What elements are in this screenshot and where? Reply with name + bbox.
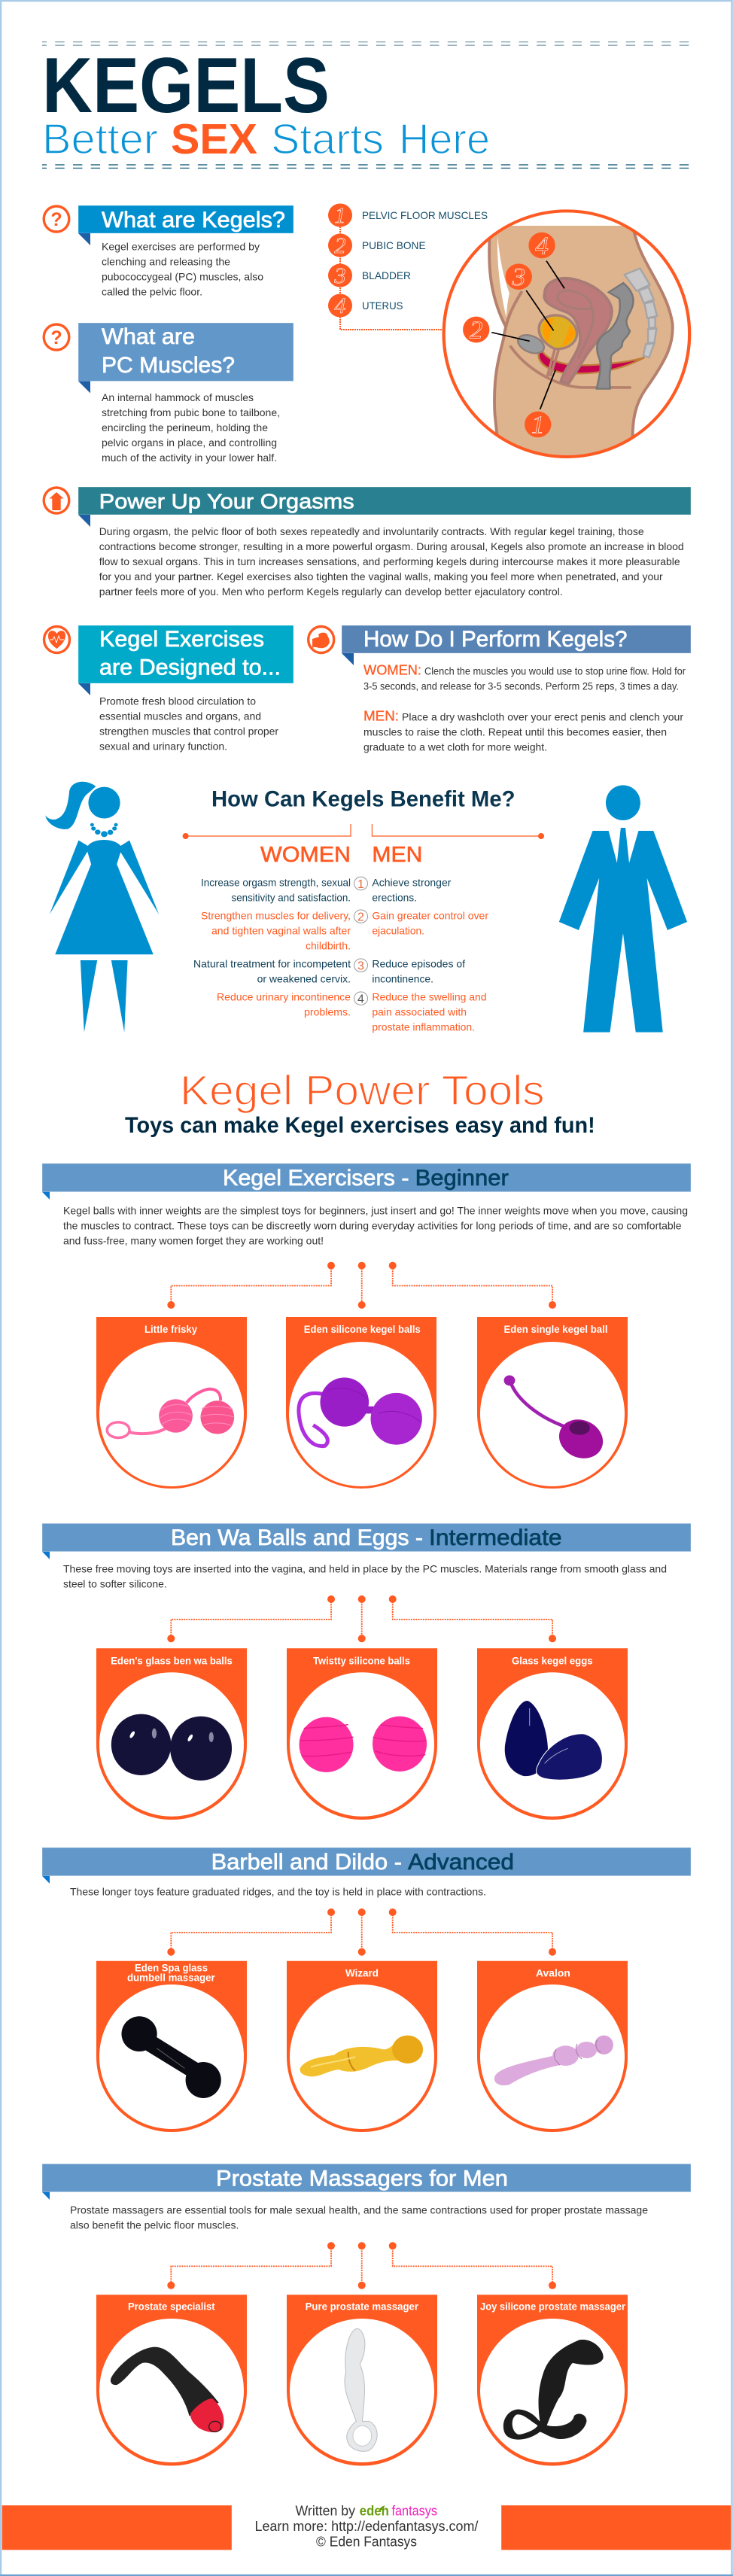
body text <box>102 391 280 464</box>
benefits: row 2: childbirth. <box>306 939 351 951</box>
heading banner <box>78 323 294 393</box>
body text: encircling the perineum, holding the <box>102 421 268 433</box>
body text: and fuss-free, many women forget they are working out! <box>63 1234 324 1246</box>
body text: pelvic organs in place, and controlling <box>102 436 277 449</box>
card: eden single kegel ball: Eden single kegel ball <box>504 1323 608 1335</box>
panel: how do i perform kegels <box>309 625 691 753</box>
credit text: Learn more: http://edenfantasys.com/ <box>254 2519 478 2534</box>
pelvic floor muscle <box>539 351 644 373</box>
icon: man figure <box>559 785 687 1033</box>
body text <box>63 1204 688 1246</box>
subtitle: Starts <box>271 115 384 163</box>
subheading: Toys can make Kegel exercises easy and fun! <box>125 1113 595 1138</box>
connector lines <box>183 824 544 839</box>
body text: men: muscles to raise the cloth. Repeat until this becomes easier, then <box>363 726 667 738</box>
connector <box>167 1908 556 1956</box>
callout number 3 <box>506 263 532 291</box>
callout number 1 <box>525 411 551 439</box>
body text: much of the activity in your lower half. <box>102 452 277 464</box>
body text: men: MEN: <box>363 709 399 724</box>
body text <box>99 695 278 753</box>
benefits: row 4: 4 <box>357 993 364 1006</box>
body text: sexual and urinary function. <box>99 741 227 753</box>
body text: women: Clench the muscles you would use to stop urine flow. Hold for <box>424 665 686 677</box>
benefits: row 2: and tighten vaginal walls after <box>211 924 351 936</box>
tailbone <box>625 269 657 357</box>
legend: anatomy key: 3 <box>334 263 346 288</box>
credit text: fantasys <box>391 2504 437 2519</box>
panel: power up your orgasms <box>44 487 691 598</box>
body text: women <box>363 663 686 692</box>
subtitle: Better <box>42 115 158 163</box>
body text: women: WOMEN: <box>363 663 421 678</box>
connector <box>167 1262 556 1309</box>
subtitle <box>42 115 490 163</box>
label: women: WOMEN <box>260 843 351 867</box>
body text: women: 3-5 seconds, and release for 3-5 seconds. Perform 25 reps, 3 times a day. <box>363 680 679 692</box>
body text: flow to sexual organs. This in turn increases sensations, and performing kegels during intercourse makes it more pleasurable <box>99 555 680 567</box>
card: glass kegel eggs <box>477 1648 628 1820</box>
anatomy diagram <box>444 211 689 461</box>
bladder <box>539 315 577 349</box>
callout number 1: 1 <box>531 411 545 439</box>
credit text: Written by <box>295 2504 355 2519</box>
benefits: row 4: pain associated with <box>372 1005 467 1017</box>
card: prostate specialist <box>96 2295 247 2465</box>
benefits: row 3: incontinence. <box>372 972 433 984</box>
subtitle: SEX <box>171 115 257 163</box>
heading banner <box>342 625 691 665</box>
icon: up arrow <box>44 488 69 513</box>
body text: men: Place a dry washcloth over your erect penis and clench your <box>402 711 683 723</box>
card: eden single kegel ball <box>477 1317 628 1489</box>
benefits: row 1: erections. <box>372 891 417 903</box>
footer <box>2 2504 731 2550</box>
legend: anatomy key: BLADDER <box>362 269 411 281</box>
heading banner: PC Muscles? <box>102 353 235 378</box>
body text: These longer toys feature graduated ridges, and the toy is held in place with contractions. <box>70 1886 486 1898</box>
heading: kegel power tools: Kegel Power Tools <box>180 1066 545 1114</box>
body text: clenching and releasing the <box>102 256 230 268</box>
legend: anatomy key: UTERUS <box>362 300 403 312</box>
banner: Intermediate <box>429 1525 562 1550</box>
card: avalon <box>477 1961 628 2132</box>
body text: These free moving toys are inserted into the vagina, and held in place by the PC muscles. Materials range from smooth glass and <box>63 1562 667 1574</box>
legend: anatomy key <box>328 203 488 330</box>
card: eden silicone kegel balls <box>286 1317 436 1489</box>
body text: men: graduate to a wet cloth for more weight. <box>363 741 547 753</box>
body silhouette <box>489 226 673 461</box>
banner <box>42 2164 691 2200</box>
legend: anatomy key: PELVIC FLOOR MUSCLES <box>362 209 488 221</box>
body text: also benefit the pelvic floor muscles. <box>70 2219 239 2231</box>
body text: An internal hammock of muscles <box>102 391 254 403</box>
section: prostate massagers <box>42 2164 691 2465</box>
benefits: row 1: Increase orgasm strength, sexual <box>201 876 351 888</box>
body text: pubococcygeal (PC) muscles, also <box>102 271 263 283</box>
body text: contractions become stronger, resulting in a more powerful orgasm. During arousal, Kegels also promote an increase in blood <box>99 540 684 552</box>
card: little frisky <box>96 1317 247 1489</box>
body text: steel to softer silicone. <box>63 1577 167 1589</box>
body text: Prostate massagers are essential tools for male sexual health, and the same contractions used for proper prostate massage <box>70 2204 648 2216</box>
card: prostate specialist: Prostate specialist <box>128 2301 215 2313</box>
icon: woman figure <box>45 782 159 1033</box>
banner <box>42 1848 691 1884</box>
heading banner <box>78 625 294 695</box>
card: twistty silicone balls <box>287 1648 437 1820</box>
callout number 4: 4 <box>535 232 549 260</box>
icon: question mark <box>44 324 69 350</box>
card: wizard: Wizard <box>345 1967 379 1979</box>
heading banner: Kegel Exercises <box>99 627 264 652</box>
callout number 4 <box>528 232 555 260</box>
benefits: row 1: sensitivity and satisfaction. <box>232 891 351 903</box>
benefits: row 1: 1 <box>357 878 364 891</box>
benefits: row 2 <box>201 909 488 951</box>
benefits: row 3: or weakened cervix. <box>257 972 351 984</box>
body text: Kegel exercises are performed by <box>102 241 260 253</box>
heading banner: What are Kegels? <box>102 208 285 233</box>
card: eden's glass ben wa balls: Eden's glass ben wa balls <box>111 1655 233 1667</box>
legend: anatomy key: 4 <box>334 293 346 318</box>
benefits: row 4 <box>217 990 487 1033</box>
benefits: row 2: Strengthen muscles for delivery, <box>201 909 351 921</box>
benefits: row 4: problems. <box>304 1005 351 1017</box>
body text <box>99 525 684 598</box>
panel: what are kegels <box>44 205 294 298</box>
panel: kegel exercises are designed to <box>44 625 294 753</box>
subtitle: Here <box>399 115 490 163</box>
body text: men <box>363 709 683 753</box>
body text: stretching from pubic bone to tailbone, <box>102 406 280 418</box>
uterus <box>544 278 612 383</box>
card: eden's glass ben wa balls <box>96 1648 247 1820</box>
body text <box>70 2204 648 2231</box>
body text: essential muscles and organs, and <box>99 710 261 722</box>
card: joy silicone prostate massager: Joy silicone prostate massager <box>480 2301 626 2313</box>
banner: Barbell and Dildo - <box>211 1850 402 1875</box>
benefits: row 1: Achieve stronger <box>372 876 452 888</box>
card: avalon: Avalon <box>536 1967 570 1979</box>
icon: heart <box>44 626 69 653</box>
panel: what are pc muscles <box>44 323 294 464</box>
icon: question mark: ? <box>50 327 62 348</box>
icon: question mark <box>44 206 69 232</box>
card: eden spa glass dumbell massager <box>96 1961 247 2132</box>
connector <box>167 2242 556 2289</box>
card: wizard <box>287 1961 437 2132</box>
heading: how can kegels benefit me: How Can Kegels Benefit Me? <box>211 787 515 812</box>
benefits: row 3: Natural treatment for incompetent <box>193 957 351 969</box>
section: intermediate <box>42 1523 691 1820</box>
card: pure prostate massager: Pure prostate massager <box>306 2301 419 2313</box>
heading banner <box>78 487 691 527</box>
benefits: row 3: Reduce episodes of <box>372 957 465 969</box>
credit text: eden <box>360 2504 389 2519</box>
body text: for you and your partner. Kegel exercises also tighten the vaginal walls, making you feel more when penetrated, and your <box>99 570 663 582</box>
legend: anatomy key: 2 <box>334 233 346 258</box>
credit text: © Eden Fantasys <box>316 2535 417 2550</box>
card: glass kegel eggs: Glass kegel eggs <box>512 1655 593 1667</box>
benefits: row 4: Reduce urinary incontinence <box>217 990 351 1002</box>
card: eden silicone kegel balls: Eden silicone kegel balls <box>304 1323 421 1335</box>
callout lines <box>491 261 564 409</box>
benefits: row 2: ejaculation. <box>372 924 424 936</box>
body text: During orgasm, the pelvic floor of both sexes repeatedly and involuntarily contracts. With regular kegel training, those <box>99 525 644 537</box>
pubic bone <box>517 334 545 354</box>
credit text <box>254 2504 478 2550</box>
card: twistty silicone balls: Twistty silicone balls <box>313 1655 410 1667</box>
heading banner <box>78 205 294 245</box>
card: pure prostate massager <box>287 2295 437 2465</box>
benefits: row 3: 3 <box>357 960 364 973</box>
body text: the muscles to contract. These toys can be discreetly worn during everyday activities for long periods of time, and are so comfortable <box>63 1219 682 1231</box>
title: KEGELS <box>42 42 330 129</box>
banner: Kegel Exercisers - <box>223 1166 409 1191</box>
banner: Beginner <box>415 1166 509 1191</box>
legend: anatomy key: 1 <box>334 203 346 228</box>
callout number 2 <box>463 316 489 344</box>
body text <box>102 241 263 298</box>
body text: partner feels more of you. Men who perform Kegels regularly can develop better ejaculatory control. <box>99 585 563 598</box>
icon: flexed arm <box>309 626 334 653</box>
body text: Kegel balls with inner weights are the simplest toys for beginners, just insert and go! The inner weights move when you move, causing <box>63 1204 688 1216</box>
icon: question mark: ? <box>50 209 62 230</box>
benefits: row 3 <box>193 957 465 984</box>
heading banner: How Do I Perform Kegels? <box>363 627 628 652</box>
callout number 3: 3 <box>511 263 525 291</box>
benefits: row 4: prostate inflammation. <box>372 1020 475 1033</box>
heading banner: What are <box>102 324 195 349</box>
benefits: row 4: Reduce the swelling and <box>372 990 487 1002</box>
card: eden spa glass dumbell massager: Eden Spa glass <box>135 1961 208 1973</box>
section: advanced <box>42 1848 691 2132</box>
section: beginner <box>42 1163 691 1489</box>
banner: Prostate Massagers for Men <box>216 2167 508 2191</box>
body text <box>63 1562 667 1589</box>
banner: Advanced <box>408 1850 514 1875</box>
heading banner: Power Up Your Orgasms <box>99 490 354 513</box>
banner: Ben Wa Balls and Eggs - <box>171 1525 423 1550</box>
banner <box>42 1163 691 1200</box>
benefits: row 1 <box>201 876 452 903</box>
body text: strengthen muscles that control proper <box>99 725 278 738</box>
label: men: MEN <box>372 843 422 867</box>
card: eden spa glass dumbell massager: dumbell massager <box>127 1972 215 1984</box>
rectum <box>597 283 633 389</box>
connector <box>167 1595 556 1642</box>
callout number 2: 2 <box>470 316 483 344</box>
heading banner: are Designed to... <box>99 655 281 680</box>
benefits: row 2: 2 <box>357 911 364 924</box>
card: little frisky: Little frisky <box>144 1323 197 1335</box>
body text: called the pelvic floor. <box>102 286 202 298</box>
banner <box>42 1523 691 1559</box>
card: joy silicone prostate massager <box>477 2295 628 2465</box>
legend: anatomy key: PUBIC BONE <box>362 239 426 251</box>
benefits: row 2: Gain greater control over <box>372 909 488 921</box>
body text: Promote fresh blood circulation to <box>99 695 256 707</box>
